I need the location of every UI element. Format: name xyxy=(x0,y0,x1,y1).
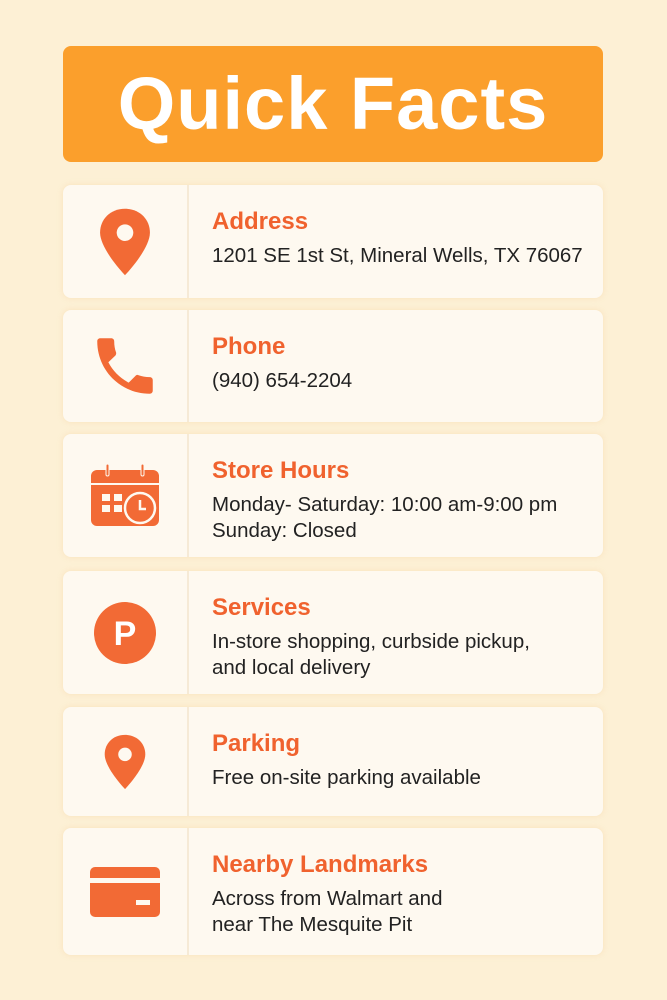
text: phone xyxy=(212,333,352,392)
text: phone: Phone xyxy=(212,333,285,360)
icon: location pin xyxy=(100,208,150,276)
text: landmarks xyxy=(212,851,442,936)
icon: P circle xyxy=(94,602,156,664)
text: hours: Store Hours xyxy=(212,457,349,484)
text: address xyxy=(212,208,583,267)
card: landmarks xyxy=(63,828,603,955)
icon: card xyxy=(90,867,160,917)
text: parking xyxy=(212,730,481,789)
icon: calendar xyxy=(91,464,159,526)
text: parking: Parking xyxy=(212,730,300,757)
text: services: Services xyxy=(212,594,311,621)
icon: P circle: P xyxy=(114,614,136,652)
card: parking xyxy=(63,707,603,816)
text: landmarks: Across from Walmart and xyxy=(212,887,442,910)
title xyxy=(63,46,603,162)
text: landmarks: Nearby Landmarks xyxy=(212,851,428,878)
card: address xyxy=(63,185,603,298)
text: phone: (940) 654-2204 xyxy=(212,369,352,392)
text: hours: Monday- Saturday: 10:00 am-9:00 pm xyxy=(212,493,557,516)
icon: phone xyxy=(97,338,153,394)
text: parking: Free on-site parking available xyxy=(212,766,481,789)
card: phone xyxy=(63,310,603,422)
text: hours: Sunday: Closed xyxy=(212,519,357,542)
icon: pin small xyxy=(104,734,146,789)
text: services xyxy=(212,594,530,679)
text: services: and local delivery xyxy=(212,656,370,679)
text: address: 1201 SE 1st St, Mineral Wells, TX 76067 xyxy=(212,244,583,267)
text: landmarks: near The Mesquite Pit xyxy=(212,913,412,936)
text: hours xyxy=(212,457,557,542)
card: services xyxy=(63,571,603,694)
text: services: In-store shopping, curbside pickup, xyxy=(212,630,530,653)
card: hours xyxy=(63,434,603,557)
title: Quick Facts xyxy=(118,62,548,145)
text: address: Address xyxy=(212,208,308,235)
